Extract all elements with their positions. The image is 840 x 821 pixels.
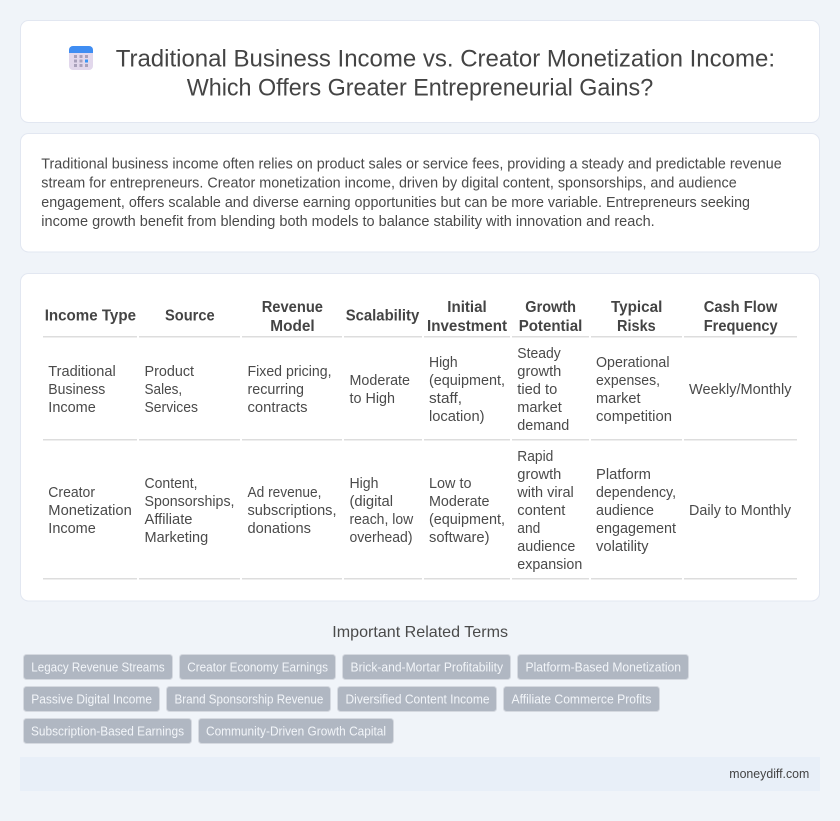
table row: creator monetization income: reach, low	[350, 511, 413, 528]
table row: creator monetization income: volatility	[596, 538, 649, 555]
panel: introduction text	[20, 134, 820, 252]
tag: Creator Economy Earnings	[187, 661, 328, 675]
table row: traditional business income: recurring	[248, 381, 304, 398]
table row: creator monetization income: Sponsorships,	[144, 493, 234, 510]
table row: traditional business income: High	[429, 354, 458, 371]
table row: creator monetization income: Marketing	[144, 529, 208, 546]
tag: Brick-and-Mortar Profitability	[350, 661, 504, 675]
panel: comparison table	[20, 274, 820, 601]
tag	[166, 686, 330, 712]
table row: traditional business income: location)	[429, 408, 484, 425]
table row: traditional business income: to High	[350, 390, 395, 407]
table header row: Potential	[519, 318, 582, 335]
table row: creator monetization income: audience	[517, 538, 575, 555]
table row: creator monetization income: content	[517, 502, 566, 519]
footer bar	[20, 757, 820, 791]
table row: creator monetization income: Ad revenue,	[248, 484, 322, 501]
table row: traditional business income: Business	[48, 381, 105, 398]
tag	[504, 686, 660, 712]
table row: creator monetization income: donations	[248, 520, 311, 537]
table row: traditional business income: staff,	[429, 390, 462, 407]
table header row: Frequency	[704, 318, 778, 335]
tag	[338, 686, 496, 712]
table row: traditional business income: Operational	[596, 354, 670, 371]
tag	[24, 718, 192, 744]
table header row: Risks	[617, 318, 656, 335]
tag	[180, 654, 336, 680]
panel: title header	[20, 20, 820, 122]
table header row	[45, 299, 778, 335]
tag: Passive Digital Income	[31, 693, 152, 707]
table row: creator monetization income: growth	[517, 466, 561, 483]
table row: traditional business income	[48, 345, 792, 434]
table row: creator monetization income: engagement	[596, 520, 677, 537]
title: Traditional Business Income vs. Creator Monetization Income:	[116, 46, 775, 73]
table row: creator monetization income: Moderate	[429, 493, 490, 510]
table header row: Scalability	[346, 308, 419, 325]
table row: traditional business income: market	[517, 399, 563, 416]
icon: calendar	[69, 46, 93, 70]
table header row: Source	[165, 308, 215, 325]
table row: traditional business income: Moderate	[350, 372, 410, 389]
table row: creator monetization income	[48, 448, 791, 573]
table row: traditional business income: Income	[48, 399, 96, 416]
table header row: Revenue	[262, 299, 323, 316]
table row: traditional business income: market	[596, 390, 641, 407]
tag: Affiliate Commerce Profits	[512, 693, 652, 707]
table row: traditional business income: contracts	[248, 399, 308, 416]
table row: creator monetization income: Creator	[48, 484, 95, 501]
table row: creator monetization income: audience	[596, 502, 654, 519]
table header row: Typical	[611, 299, 662, 316]
footer credit: moneydiff.com	[729, 766, 809, 781]
tag: Platform-Based Monetization	[526, 661, 681, 675]
intro paragraph	[41, 156, 782, 230]
table row: creator monetization income: High	[350, 475, 378, 492]
table row: traditional business income: Services	[144, 399, 198, 416]
intro paragraph: stream for entrepreneurs. Creator monetization income, driven by digital content, sponsorships, and audience	[41, 174, 737, 192]
table row: creator monetization income: overhead)	[350, 529, 413, 546]
table header row: Model	[270, 318, 315, 335]
table header row: Investment	[427, 318, 508, 335]
table row: traditional business income: competition	[596, 408, 672, 425]
tag	[24, 654, 172, 680]
table row: creator monetization income: Content,	[144, 475, 198, 492]
table row: traditional business income: (equipment,	[429, 372, 505, 389]
table row: creator monetization income: dependency,	[596, 484, 676, 501]
table row: creator monetization income: Low to	[429, 475, 472, 492]
intro paragraph: engagement, offers scalable and diverse earning opportunities but can be more variable. Entrepreneurs seeking	[41, 194, 750, 211]
tag: Brand Sponsorship Revenue	[174, 693, 323, 707]
intro paragraph: Traditional business income often relies on product sales or service fees, providing a steady and predictable revenue	[41, 156, 782, 172]
table header row: Initial	[447, 299, 487, 316]
table header row: Income Type	[45, 308, 136, 325]
table row: traditional business income: Fixed pricing,	[248, 363, 332, 380]
table row: creator monetization income: software)	[429, 529, 490, 546]
title	[116, 46, 775, 102]
tag	[198, 718, 394, 744]
table row: creator monetization income: Affiliate	[144, 511, 192, 528]
table row: traditional business income: Weekly/Monthly	[689, 381, 792, 398]
table header row: Growth	[525, 299, 576, 316]
table row: creator monetization income: (equipment,	[429, 511, 505, 528]
table row: traditional business income: Product	[144, 363, 195, 380]
table row: traditional business income: growth	[517, 363, 561, 380]
table row: creator monetization income: Daily to Monthly	[689, 502, 791, 519]
table row: traditional business income: demand	[517, 417, 569, 434]
tag: Legacy Revenue Streams	[31, 661, 165, 675]
table row: creator monetization income: with viral	[516, 484, 574, 501]
table row: creator monetization income: Rapid	[517, 448, 553, 465]
table row: traditional business income: expenses,	[596, 372, 660, 389]
table row: creator monetization income: Income	[48, 520, 96, 537]
table header row: Cash Flow	[704, 299, 778, 316]
tag	[342, 654, 510, 680]
tag	[24, 686, 160, 712]
tag: Subscription-Based Earnings	[31, 725, 184, 739]
tag list: related terms	[24, 654, 688, 744]
tag: Community-Driven Growth Capital	[206, 725, 386, 739]
table row: traditional business income: Steady	[517, 345, 561, 362]
table row: traditional business income: tied to	[517, 381, 557, 398]
table row: creator monetization income: Monetization	[48, 502, 132, 519]
table row: creator monetization income: expansion	[517, 556, 582, 573]
table row: creator monetization income: subscriptions,	[248, 502, 336, 519]
intro paragraph: income growth benefit from blending both models to balance stability with innovation and reach.	[41, 213, 655, 230]
heading: important related terms: Important Related Terms	[332, 624, 508, 641]
table row: traditional business income: Traditional	[48, 363, 116, 380]
table row: creator monetization income: and	[517, 520, 540, 537]
tag: Diversified Content Income	[346, 693, 490, 707]
title: Which Offers Greater Entrepreneurial Gains?	[187, 75, 653, 102]
table row: creator monetization income: Platform	[596, 466, 651, 483]
tag	[518, 654, 688, 680]
table row: traditional business income: Sales,	[144, 381, 182, 398]
table row: creator monetization income: (digital	[350, 493, 393, 510]
